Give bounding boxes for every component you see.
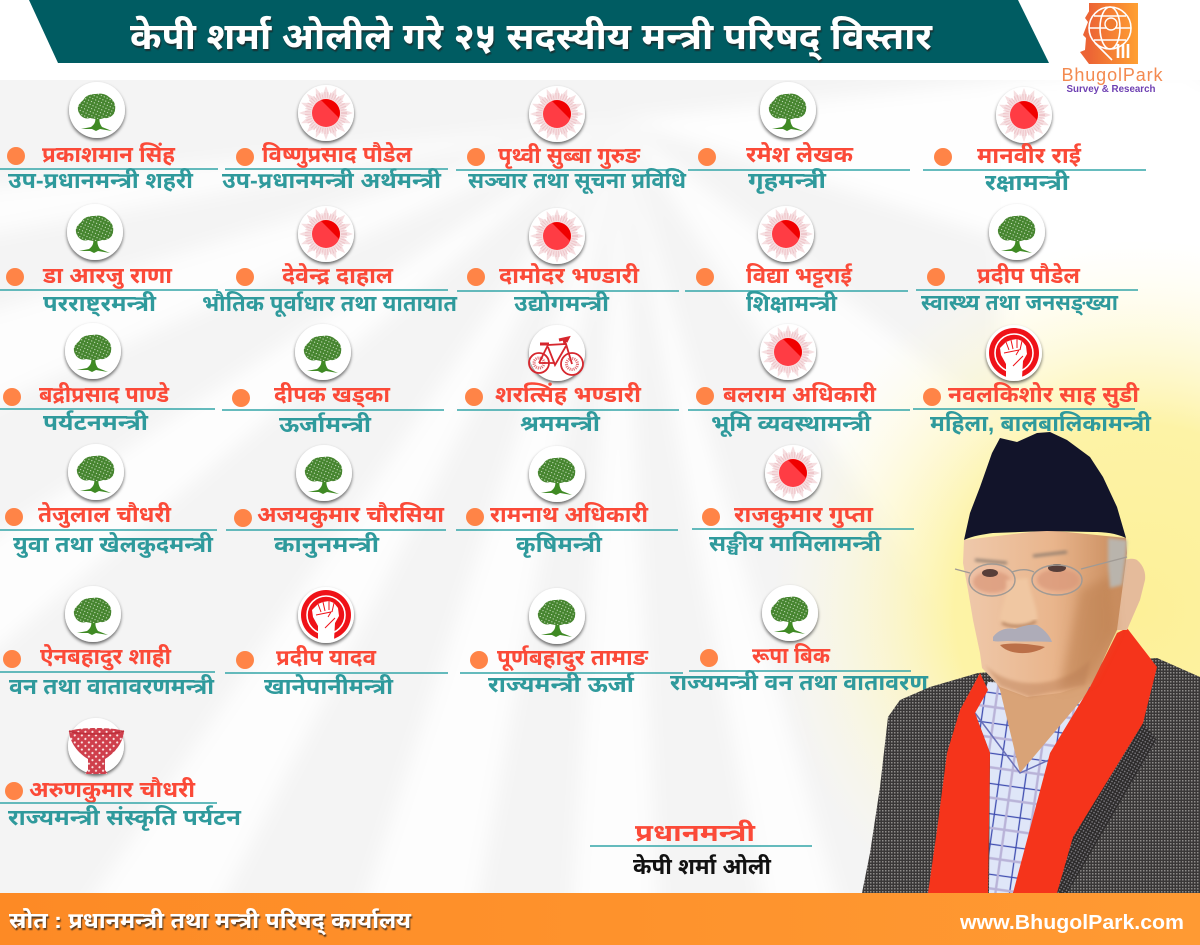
title: केपी शर्मा ओलीले गरे २५ सदस्यीय मन्त्री परिषद् विस्तार	[130, 15, 933, 60]
cheek shading	[1060, 575, 1115, 690]
minister: ऐनबहादुर शाही: वन तथा वातावरणमन्त्री	[9, 674, 215, 699]
website: www.BhugolPark.com	[959, 912, 1184, 934]
footer bar	[0, 893, 1200, 945]
minister: शरत्सिंह भण्डारी: श्रममन्त्री	[520, 411, 601, 436]
minister: प्रदीप यादव: खानेपानीमन्त्री	[264, 674, 394, 699]
minister: पृथ्वी सुब्बा गुरुङ: पृथ्वी सुब्बा गुरुङ	[498, 143, 641, 169]
title banner	[29, 0, 1049, 63]
minister: तेजुलाल चौधरी: युवा तथा खेलकुदमन्त्री	[13, 532, 214, 558]
minister: रूपा बिक	[670, 585, 929, 695]
minister: मानवीर राई	[923, 87, 1146, 195]
temple hair	[1108, 538, 1127, 588]
minister: देवेन्द्र दाहाल: भौतिक पूर्वाधार तथा यातायात	[202, 291, 457, 318]
minister: बलराम अधिकारी: बलराम अधिकारी	[723, 382, 877, 407]
minister: मानवीर राई: मानवीर राई	[977, 143, 1082, 168]
minister: प्रदीप पौडेल: प्रदीप पौडेल	[977, 263, 1081, 288]
minister: प्रदीप पौडेल	[916, 204, 1138, 316]
neck	[985, 640, 1112, 773]
minister: विद्या भट्टराई: शिक्षामन्त्री	[746, 291, 838, 316]
minister: विद्या भट्टराई	[685, 206, 908, 316]
minister: डा आरजु राणा: डा आरजु राणा	[42, 263, 173, 289]
minister: विद्या भट्टराई: विद्या भट्टराई	[746, 263, 853, 288]
minister: रूपा बिक: राज्यमन्त्री वन तथा वातावरण	[670, 670, 929, 695]
minister: तेजुलाल चौधरी	[0, 444, 217, 558]
moustache	[993, 625, 1052, 642]
minister: बद्रीप्रसाद पाण्डे: पर्यटनमन्त्री	[43, 410, 149, 435]
minister: रामनाथ अधिकारी: रामनाथ अधिकारी	[490, 502, 649, 527]
minister: प्रदीप यादव	[225, 587, 448, 699]
minister: विष्णुप्रसाद पौडेल: विष्णुप्रसाद पौडेल	[262, 142, 413, 168]
minister: पूर्णबहादुर तामाङ	[460, 588, 683, 697]
minister: प्रकाशमान सिंह	[0, 82, 218, 193]
glasses	[955, 557, 1127, 596]
minister: डा आरजु राणा: परराष्ट्रमन्त्री	[43, 291, 157, 317]
minister: विष्णुप्रसाद पौडेल	[222, 85, 448, 193]
minister: अरुणकुमार चौधरी: अरुणकुमार चौधरी	[29, 777, 196, 803]
minister: अजयकुमार चौरसिया: अजयकुमार चौरसिया	[257, 502, 445, 528]
minister: रमेश लेखक: गृहमन्त्री	[748, 168, 827, 194]
minister: पृथ्वी सुब्बा गुरुङ: सञ्चार तथा सूचना प्रविधि	[468, 168, 687, 195]
logo: BhugolPark: BhugolPark	[1062, 65, 1164, 85]
minister: अजयकुमार चौरसिया: कानुनमन्त्री	[274, 532, 380, 558]
minister: देवेन्द्र दाहाल	[202, 206, 457, 318]
minister: विष्णुप्रसाद पौडेल: उप-प्रधानमन्त्री अर्थमन्त्री	[222, 168, 442, 193]
minister: राजकुमार गुप्ता: सङ्घीय मामिलामन्त्री	[709, 531, 882, 556]
prime minister label	[590, 819, 812, 879]
source: स्रोत : प्रधानमन्त्री तथा मन्त्री परिषद् कार्यालय	[9, 908, 412, 935]
minister: रामनाथ अधिकारी: कृषिमन्त्री	[516, 532, 603, 558]
minister: प्रकाशमान सिंह: प्रकाशमान सिंह	[42, 142, 176, 167]
eye sockets	[973, 569, 1079, 593]
minister: बद्रीप्रसाद पाण्डे: बद्रीप्रसाद पाण्डे	[39, 382, 169, 407]
minister: रमेश लेखक: रमेश लेखक	[746, 142, 854, 167]
portrait: KP Sharma Oli	[862, 432, 1200, 893]
minister: तेजुलाल चौधरी: तेजुलाल चौधरी	[38, 502, 172, 528]
minister: ऐनबहादुर शाही: ऐनबहादुर शाही	[40, 644, 172, 671]
nostril shading	[1002, 621, 1036, 626]
cap	[964, 432, 1126, 540]
minister: नवलकिशोर साह सुडी: महिला, बालबालिकामन्त्री	[930, 411, 1152, 436]
chin shading	[985, 660, 1090, 697]
jacket	[862, 658, 1200, 893]
minister: पूर्णबहादुर तामाङ: राज्यमन्त्री ऊर्जा	[488, 672, 635, 697]
minister: दीपक खड्का	[222, 324, 444, 437]
minister: प्रकाशमान सिंह: उप-प्रधानमन्त्री शहरी	[8, 168, 194, 193]
minister: दीपक खड्का: ऊर्जामन्त्री	[279, 412, 372, 437]
minister: दामोदर भण्डारी: उद्योगमन्त्री	[514, 291, 610, 316]
minister: राजकुमार गुप्ता: राजकुमार गुप्ता	[734, 502, 874, 528]
minister: प्रदीप पौडेल: स्वास्थ्य तथा जनसङ्ख्या	[921, 290, 1118, 316]
prime minister label: प्रधानमन्त्री	[635, 819, 756, 847]
minister: मानवीर राई: रक्षामन्त्री	[985, 170, 1070, 195]
minister: बलराम अधिकारी	[688, 324, 910, 438]
minister: बलराम अधिकारी: भूमि व्यवस्थामन्त्री	[711, 411, 872, 438]
minister: प्रदीप यादव: प्रदीप यादव	[276, 645, 377, 670]
logo: BhugolPark: Survey & Research	[1066, 84, 1156, 95]
face	[963, 530, 1127, 697]
minister: अरुणकुमार चौधरी	[0, 718, 242, 831]
minister: डा आरजु राणा	[0, 204, 218, 317]
minister: शरत्सिंह भण्डारी: शरत्सिंह भण्डारी	[495, 382, 642, 407]
minister: नवलकिशोर साह सुडी	[913, 325, 1152, 436]
minister: रूपा बिक: रूपा बिक	[752, 643, 831, 668]
prime minister label: केपी शर्मा ओली	[633, 854, 772, 879]
minister: अजयकुमार चौरसिया	[226, 445, 446, 558]
minister: दामोदर भण्डारी: दामोदर भण्डारी	[499, 263, 640, 288]
minister: शरत्सिंह भण्डारी	[457, 325, 679, 436]
eyebrows	[975, 552, 1067, 563]
minister: ऐनबहादुर शाही	[0, 586, 215, 699]
minister: राजकुमार गुप्ता	[692, 445, 914, 556]
scarf	[928, 628, 1157, 893]
minister: पूर्णबहादुर तामाङ: पूर्णबहादुर तामाङ	[497, 645, 649, 672]
ear	[1117, 559, 1145, 630]
minister: रामनाथ अधिकारी	[456, 446, 678, 558]
lapel	[1050, 723, 1157, 893]
minister: दामोदर भण्डारी	[457, 208, 679, 316]
minister: पृथ्वी सुब्बा गुरुङ	[456, 86, 687, 195]
minister: बद्रीप्रसाद पाण्डे	[0, 323, 215, 435]
logo: BhugolPark	[1062, 3, 1164, 95]
shirt	[975, 682, 1090, 893]
minister: रमेश लेखक	[688, 82, 910, 194]
minister: अरुणकुमार चौधरी: राज्यमन्त्री संस्कृति पर्यटन	[8, 805, 242, 831]
eyes	[982, 564, 1066, 577]
minister: देवेन्द्र दाहाल: देवेन्द्र दाहाल	[282, 263, 394, 288]
lips	[1000, 644, 1045, 653]
collar edges	[975, 687, 1090, 773]
nose	[1000, 578, 1037, 626]
minister: नवलकिशोर साह सुडी: नवलकिशोर साह सुडी	[948, 382, 1140, 408]
minister: दीपक खड्का: दीपक खड्का	[274, 382, 391, 408]
